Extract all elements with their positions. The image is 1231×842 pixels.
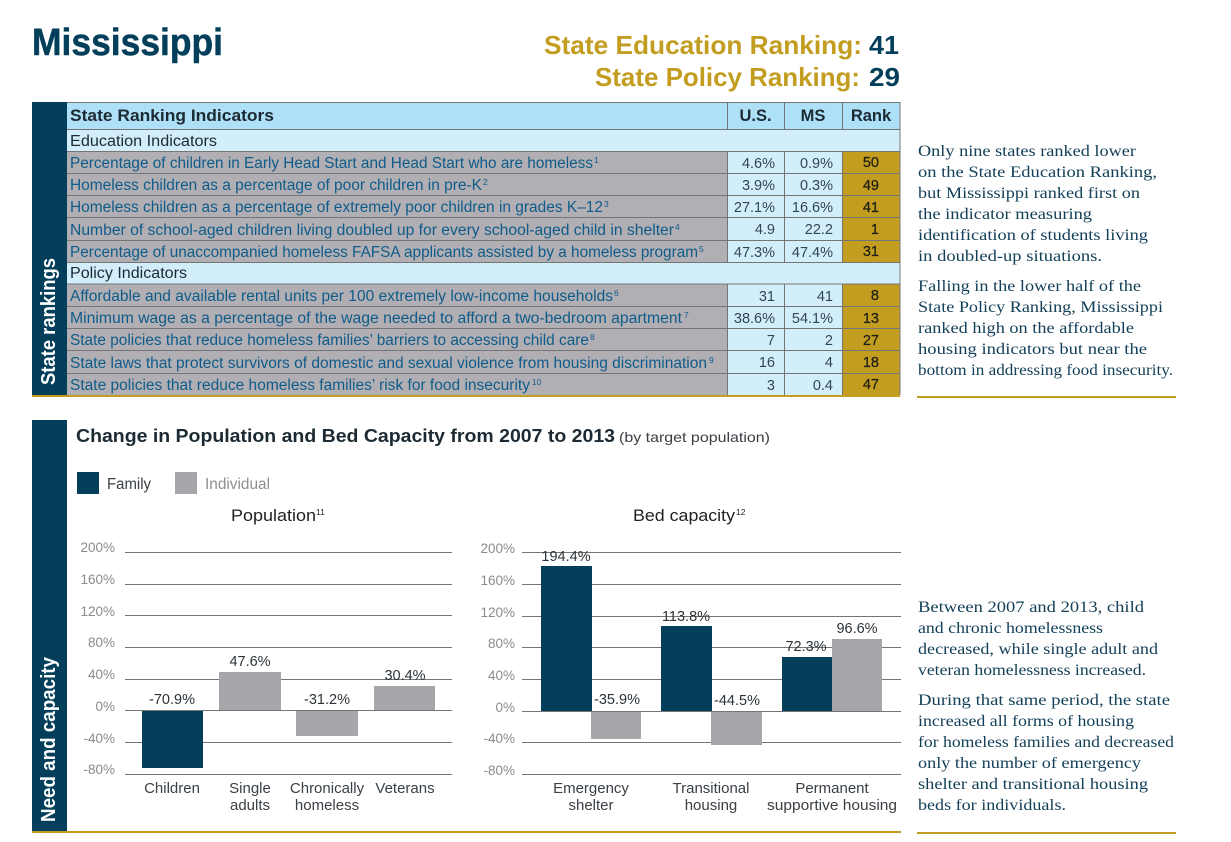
y axis labels: 120% — [480, 605, 515, 620]
text block: need and capacity commentary: veteran homelessness increased. — [918, 662, 1146, 679]
row: food insecurity: 47 — [863, 377, 879, 393]
row: rental units: Affordable and available rental units per 100 extremely low-income households — [70, 288, 613, 305]
legend: Individual — [205, 476, 270, 493]
row: doubled up: 4 — [675, 222, 680, 232]
text block: need and capacity commentary: Between 2007 and 2013, child — [918, 599, 1144, 616]
y axis labels: 200% — [80, 540, 115, 555]
row: minimum wage: 38.6% — [734, 311, 775, 327]
row: FAFSA: Percentage of unaccompanied homeless FAFSA applicants assisted by a homeless program — [70, 244, 698, 261]
text block: need and capacity commentary: increased all forms of housing — [918, 713, 1134, 730]
row: child care: 8 — [590, 332, 595, 342]
text block: state rankings commentary — [918, 143, 1173, 379]
y axis labels: 0% — [495, 700, 515, 715]
bars: emergency shelter: Emergency — [553, 780, 629, 797]
row: K-12: 16.6% — [792, 200, 833, 216]
row: head start — [67, 151, 900, 173]
panel: need and capacity side label: Need and capacity — [38, 656, 60, 822]
table header: U.S. — [739, 107, 772, 125]
row: rental units — [67, 284, 900, 306]
text block: state rankings commentary: State Policy Ranking, Mississippi — [918, 299, 1164, 316]
policy indicators subheader: Policy Indicators — [70, 265, 187, 282]
bar: children: -70.9% — [149, 692, 195, 708]
bars: transitional housing: 113.8% — [662, 609, 710, 625]
policy indicators subheader — [67, 262, 900, 284]
bar: single adults: 47.6% — [229, 654, 271, 670]
row: child care: State policies that reduce homeless families’ barriers to accessing child care — [70, 332, 589, 349]
row: rental units: 41 — [817, 289, 833, 305]
row: child care: 2 — [825, 333, 833, 349]
state education ranking: 41 — [869, 30, 899, 60]
row: food insecurity: State policies that reduce homeless families’ risk for food insecurity — [70, 377, 530, 394]
y axis labels: -80% — [483, 763, 515, 778]
bar: single adults: adults — [230, 797, 270, 814]
bars: permanent supportive housing: supportive housing — [767, 797, 897, 814]
row: rental units: 8 — [871, 288, 879, 304]
row: FAFSA: 31 — [863, 244, 879, 260]
row: child care: 7 — [767, 333, 775, 349]
table header: State Ranking Indicators — [70, 107, 274, 125]
row: FAFSA: 5 — [699, 244, 704, 254]
table header: MS — [801, 107, 825, 125]
bar: children — [142, 692, 203, 797]
row: pre-K: 0.3% — [800, 178, 833, 194]
bar: veterans: Veterans — [375, 780, 435, 797]
y axis labels: 120% — [80, 604, 115, 619]
text block: need and capacity commentary: During that same period, the state — [918, 692, 1170, 709]
row: food insecurity: 0.4 — [813, 378, 833, 394]
y axis labels: 0% — [95, 699, 115, 714]
title: Mississippi — [32, 22, 223, 64]
y axis labels: -40% — [83, 731, 115, 746]
row: minimum wage: Minimum wage as a percentage of the wage needed to afford a two-bedroom apartment — [70, 310, 683, 327]
bars: permanent supportive housing: 96.6% — [836, 621, 878, 637]
chart section heading: Change in Population and Bed Capacity from 2007 to 2013 — [76, 426, 615, 446]
legend: Family — [107, 476, 151, 493]
table header: Rank — [851, 107, 892, 125]
text block: need and capacity commentary — [918, 599, 1174, 814]
bars: emergency shelter: -35.9% — [594, 692, 640, 708]
chart section heading: (by target population) — [619, 429, 770, 445]
row: head start: 1 — [594, 155, 599, 165]
state policy ranking: 29 — [869, 62, 900, 92]
bars: permanent supportive housing: 72.3% — [785, 639, 827, 655]
text block: state rankings commentary: Only nine states ranked lower — [918, 143, 1137, 160]
row: pre-K: 49 — [863, 178, 879, 194]
y axis labels: -80% — [83, 762, 115, 777]
row: housing discrimination: State laws that protect survivors of domestic and sexual violence from housing discrimination — [70, 355, 707, 372]
text block: need and capacity commentary: and chronic homelessness — [918, 620, 1103, 637]
chart: bed capacity — [480, 541, 901, 814]
row: child care: 27 — [863, 333, 879, 349]
panel: state rankings side label — [32, 102, 67, 395]
row: K-12: 41 — [863, 200, 879, 216]
row: FAFSA: 47.4% — [792, 245, 833, 261]
bar: veterans: 30.4% — [384, 668, 426, 684]
text block: state rankings commentary: the indicator measuring — [918, 206, 1092, 223]
panel: need and capacity side label — [32, 420, 67, 831]
text block: state rankings commentary: housing indicators but near the — [918, 341, 1147, 358]
row: K-12 — [67, 195, 900, 217]
heading: population chart: 11 — [316, 507, 325, 517]
row: housing discrimination: 16 — [759, 355, 775, 371]
row: FAFSA — [67, 240, 900, 262]
legend — [77, 472, 270, 494]
row: housing discrimination: 4 — [825, 355, 833, 371]
panel: state rankings side label: State rankings — [38, 258, 60, 385]
panel: state ranking indicators table — [67, 102, 900, 395]
text block: state rankings commentary: Falling in the lower half of the — [918, 278, 1141, 295]
row: food insecurity: 3 — [767, 378, 775, 394]
row: pre-K: Homeless children as a percentage of poor children in pre-K — [70, 177, 483, 194]
row: minimum wage: 7 — [684, 310, 689, 320]
row: doubled up: Number of school-aged children living doubled up for every school-aged child in shelter — [70, 222, 674, 239]
row: child care — [67, 328, 900, 350]
row: K-12: Homeless children as a percentage of extremely poor children in grades K–12 — [70, 199, 603, 216]
heading: population chart: Population — [231, 506, 316, 525]
education indicators subheader: Education Indicators — [70, 133, 217, 150]
row: pre-K: 3.9% — [742, 178, 775, 194]
row: minimum wage — [67, 306, 900, 328]
bars: transitional housing: Transitional — [673, 780, 749, 797]
bars: transitional housing: housing — [685, 797, 737, 814]
text block: state rankings commentary: bottom in addressing food insecurity. — [918, 362, 1173, 379]
row: minimum wage: 13 — [863, 311, 879, 327]
y axis labels: 200% — [480, 541, 515, 556]
text block: state rankings commentary: identification of students living — [918, 227, 1148, 244]
y axis labels: 40% — [488, 668, 515, 683]
bars: transitional housing: -44.5% — [714, 693, 760, 709]
row: K-12: 27.1% — [734, 200, 775, 216]
text block: need and capacity commentary: for homeless families and decreased — [918, 734, 1174, 751]
row: pre-K — [67, 173, 900, 195]
text block: state rankings commentary: but Mississippi ranked first on — [918, 185, 1140, 202]
bars: emergency shelter: 194.4% — [541, 549, 591, 565]
bar: single adults: Single — [229, 780, 271, 797]
row: K-12: 3 — [604, 199, 609, 209]
row: rental units: 6 — [614, 288, 619, 298]
bar: chronically homeless: homeless — [295, 797, 359, 814]
row: head start: 4.6% — [742, 156, 775, 172]
y axis labels: 160% — [80, 572, 115, 587]
row: doubled up: 4.9 — [755, 222, 775, 238]
row: housing discrimination: 18 — [863, 355, 879, 371]
text block: state rankings commentary: on the State Education Ranking, — [918, 164, 1157, 181]
y axis labels — [480, 541, 515, 778]
row: food insecurity: 10 — [532, 377, 542, 387]
text block: need and capacity commentary: only the number of emergency — [918, 755, 1141, 772]
y axis labels: 160% — [480, 573, 515, 588]
row: pre-K: 2 — [483, 177, 488, 187]
y axis labels: -40% — [483, 731, 515, 746]
row: housing discrimination — [67, 350, 900, 373]
bar: children: Children — [144, 780, 200, 797]
bar: chronically homeless — [290, 692, 365, 814]
row: food insecurity — [67, 373, 900, 395]
bars: transitional housing — [661, 609, 762, 814]
bar: chronically homeless: -31.2% — [304, 692, 350, 708]
row: rental units: 31 — [759, 289, 775, 305]
row: doubled up: 22.2 — [805, 222, 833, 238]
state education ranking: State Education Ranking: — [544, 30, 862, 60]
bars: permanent supportive housing: Permanent — [795, 780, 870, 797]
row: housing discrimination: 9 — [709, 355, 714, 365]
state policy ranking: State Policy Ranking: — [595, 62, 860, 92]
row: head start: 50 — [863, 155, 879, 171]
heading: bed capacity chart: Bed capacity — [633, 506, 736, 525]
bar: veterans — [374, 668, 435, 797]
row: head start: Percentage of children in Early Head Start and Head Start who are homeless — [70, 155, 593, 172]
row: doubled up — [67, 217, 900, 240]
row: FAFSA: 47.3% — [734, 245, 775, 261]
text block: need and capacity commentary: decreased, while single adult and — [918, 641, 1158, 658]
text block: state rankings commentary: ranked high on the affordable — [918, 320, 1134, 337]
row: head start: 0.9% — [800, 156, 833, 172]
text block: state rankings commentary: in doubled-up situations. — [918, 248, 1102, 265]
bar: chronically homeless: Chronically — [290, 780, 365, 797]
bar: single adults — [219, 654, 281, 814]
bars: emergency shelter — [541, 549, 641, 814]
row: doubled up: 1 — [871, 222, 879, 238]
y axis labels: 80% — [488, 636, 515, 651]
row: minimum wage: 54.1% — [792, 311, 833, 327]
heading: bed capacity chart: 12 — [736, 507, 746, 517]
chart: population — [80, 540, 452, 814]
y axis labels — [80, 540, 115, 777]
bars: emergency shelter: shelter — [568, 797, 614, 814]
text block: need and capacity commentary: shelter and transitional housing — [918, 776, 1148, 793]
education indicators subheader — [67, 129, 900, 151]
table header — [67, 102, 900, 129]
text block: need and capacity commentary: beds for individuals. — [918, 797, 1066, 814]
bars: permanent supportive housing — [767, 621, 897, 814]
y axis labels: 40% — [88, 667, 115, 682]
y axis labels: 80% — [88, 635, 115, 650]
